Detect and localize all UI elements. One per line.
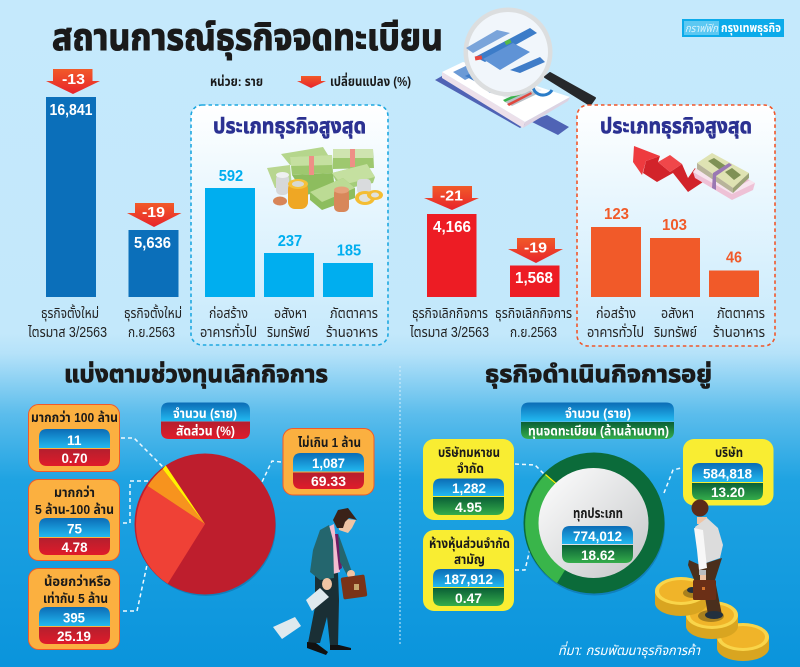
callout: 5-100 million: 5 ล้าน-100 ล้าน: [35, 502, 114, 517]
bar: closed businesses Q3/2563: [409, 186, 489, 341]
callout: company: บริษัท: [715, 445, 743, 460]
bar: real estate 103: 103: [662, 217, 687, 234]
illustration: dejected businessman: [273, 508, 367, 655]
callout: public limited company: บริษัทมหาชน: [438, 445, 500, 460]
bar: new businesses Sep 2563: 5,636: [134, 235, 171, 252]
callout: up to 5 million: 395: [63, 610, 85, 626]
slice: up to 5 million: [136, 486, 205, 584]
bar: restaurants 46: ภัตตาคาร: [717, 306, 765, 322]
bar: new businesses Sep 2563: [124, 203, 182, 341]
illustration: report and magnifier: [435, 8, 595, 135]
title: สถานการณ์ธุรกิจจดทะเบียน: [52, 17, 443, 60]
callout: ordinary partnership: ห้างหุ้นส่วนจำกัด: [429, 536, 510, 551]
bar: new businesses Sep 2563: -19: [142, 204, 165, 221]
callout: up to 5 million: น้อยกว่าหรือ: [44, 574, 111, 589]
callout: up to 1 million: 1,087: [312, 455, 345, 471]
bar: new businesses Q3/2563: ธุรกิจตั้งใหม่: [41, 304, 99, 322]
bar: closed businesses Q3/2563: 4,166: [433, 219, 471, 236]
slice: 5-100 million: [148, 469, 205, 524]
illustration: falling arrow and cash: [633, 146, 755, 200]
callout: public limited company: 4.95: [455, 499, 482, 515]
bar: closed businesses Sep 2563: ธุรกิจเลิกกิจการ: [495, 306, 572, 322]
donut chart: business types: [524, 452, 665, 596]
heading: top types: ประเภทธุรกิจสูงสุด: [213, 115, 366, 139]
bar: closed businesses Sep 2563: 1,568: [515, 270, 553, 287]
logo: graphic credit: กราฟฟิก: [685, 23, 718, 35]
bar: real estate 237: [264, 233, 314, 341]
callout: 5-100 million: 75: [67, 520, 82, 536]
segment: limited partnerships: [525, 474, 594, 583]
callout: up to 1 million: 69.33: [311, 473, 346, 489]
logo: graphic credit: กรุงเทพธุรกิจ: [721, 21, 781, 35]
unit legend: หน่วย: ราย: [210, 74, 263, 89]
bar: construction 123: ก่อสร้าง: [596, 305, 636, 322]
bar: real estate 103: ริมทรัพย์: [654, 325, 697, 341]
bar: real estate 237: ริมทรัพย์: [267, 325, 310, 341]
callout: up to 5 million: 25.19: [57, 628, 91, 644]
heading: active businesses: ธุรกิจดำเนินกิจการอยู่: [485, 360, 712, 389]
bar: construction 123: 123: [604, 206, 629, 223]
bar: new businesses Sep 2563: ธุรกิจตั้งใหม่: [124, 304, 182, 322]
callout: up to 5 million: เท่ากับ 5 ล้าน: [43, 591, 108, 606]
callout: ordinary partnership: 0.47: [455, 590, 482, 606]
callout: 5-100 million: มากกว่า: [54, 485, 95, 500]
bar: restaurants 185: ร้านอาหาร: [326, 325, 378, 341]
callout: up to 1 million: [283, 428, 374, 495]
bar: construction 592: 592: [219, 168, 243, 185]
callout: ordinary partnership: สามัญ: [454, 552, 485, 567]
illustration: money and coins: [267, 147, 383, 212]
bar: closed businesses Sep 2563: ก.ย.2563: [510, 325, 557, 341]
center label: all types: 774,012: [573, 528, 622, 544]
bar: real estate 103: อสังหา: [661, 306, 694, 322]
callout: up to 1 million: ไม่เกิน 1 ล้าน: [298, 435, 361, 450]
bar: restaurants 185: ภัตตาคาร: [330, 306, 378, 322]
legend: count and registered capital: จำนวน (ราย): [565, 406, 631, 421]
callout: over 100 million: มากกว่า 100 ล้าน: [31, 410, 118, 425]
center label: all types: 18.62: [581, 547, 615, 563]
callout: over 100 million: 11: [67, 432, 82, 448]
bar: real estate 103: [650, 217, 700, 341]
legend: count and registered capital: [521, 402, 674, 439]
callout: public limited company: 1,282: [452, 480, 486, 496]
callout: public limited company: จำกัด: [457, 461, 484, 476]
pie chart: closures by capital: [134, 454, 276, 596]
bar: construction 123: อาคารทั่วไป: [587, 323, 644, 341]
connector lines: pie callouts: [121, 438, 281, 611]
bar: construction 592: อาคารทั่วไป: [200, 323, 257, 341]
legend: count and share: จำนวน (ราย): [173, 406, 237, 421]
callout: 5-100 million: [28, 480, 120, 560]
legend: count and share: สัดส่วน (%): [176, 424, 235, 438]
bar: closed businesses Q3/2563: -21: [440, 188, 463, 204]
bar: closed businesses Sep 2563: [495, 238, 572, 341]
bar: real estate 237: 237: [278, 233, 302, 250]
bar: new businesses Q3/2563: [27, 69, 107, 341]
bar: new businesses Q3/2563: 16,841: [50, 102, 93, 119]
bar: closed businesses Q3/2563: ธุรกิจเลิกกิจการ: [412, 306, 488, 322]
callout: company: 584,818: [703, 466, 752, 482]
bar: new businesses Q3/2563: -13: [62, 71, 85, 88]
callout: company: 13.20: [711, 484, 745, 500]
panel: top closed business types: [577, 105, 775, 346]
legend: count and share: [161, 402, 250, 439]
bar: real estate 237: อสังหา: [274, 306, 307, 322]
callout: company: [683, 439, 774, 506]
bar: restaurants 46: [709, 250, 765, 341]
logo: graphic credit: [682, 19, 784, 37]
callout: up to 5 million: [28, 568, 120, 650]
bar: construction 592: ก่อสร้าง: [209, 305, 248, 322]
bar: restaurants 185: [323, 242, 378, 341]
source note: ที่มา: กรมพัฒนาธุรกิจการค้า: [558, 641, 700, 659]
bar: closed businesses Sep 2563: -19: [524, 240, 547, 256]
bar: restaurants 46: 46: [726, 250, 742, 266]
bar: construction 123: [587, 206, 644, 341]
bar: restaurants 185: 185: [337, 242, 362, 260]
callout: 5-100 million: 4.78: [62, 539, 88, 555]
callout: over 100 million: [28, 404, 120, 472]
unit legend: [210, 72, 411, 89]
bar: construction 592: [200, 168, 257, 341]
panel: top new business types: [191, 105, 388, 345]
bar: new businesses Sep 2563: ก.ย.2563: [128, 325, 175, 341]
callout: over 100 million: 0.70: [62, 450, 88, 466]
connector lines: donut callouts: [515, 464, 681, 570]
center label: all types: ทุกประเภท: [573, 505, 623, 522]
heading: top closed types: ประเภทธุรกิจสูงสุด: [600, 115, 752, 139]
legend: count and registered capital: ทุนจดทะเบียน (ล้านล้านบาท): [528, 424, 669, 438]
center label: all types: [562, 505, 633, 563]
illustration: businessman climbing coins: [655, 500, 769, 661]
slice: over 100 million: [163, 465, 205, 524]
callout: ordinary partnership: 187,912: [444, 571, 493, 587]
bar: restaurants 46: ร้านอาหาร: [713, 325, 765, 341]
unit legend: เปลี่ยนแปลง (%): [330, 72, 411, 89]
bar: closed businesses Q3/2563: ไตรมาส 3/2563: [409, 325, 489, 341]
heading: closures by capital range: แบ่งตามช่วงทุนเลิกกิจการ: [64, 360, 328, 389]
callout: public limited company: [423, 439, 514, 520]
callout: ordinary partnership: [423, 530, 514, 611]
bar: new businesses Q3/2563: ไตรมาส 3/2563: [27, 325, 107, 341]
